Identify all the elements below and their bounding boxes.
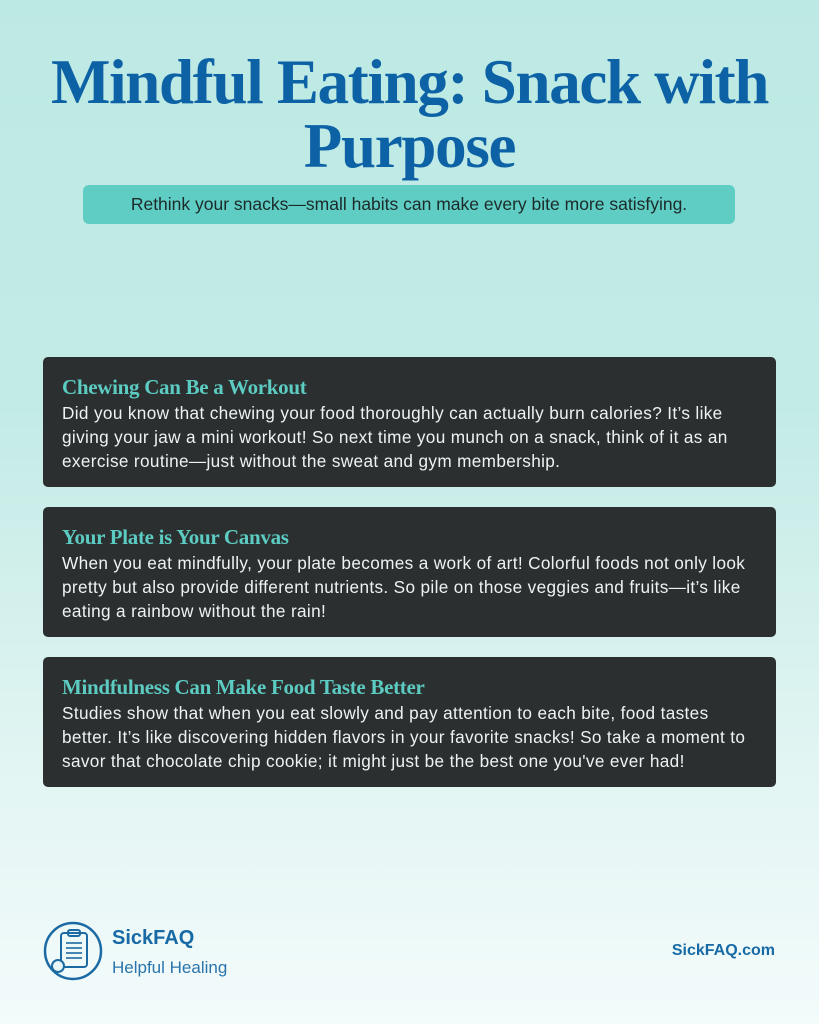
heading: plate: Your Plate is Your Canvas [62, 525, 289, 549]
title: Purpose [304, 111, 515, 181]
title [51, 47, 768, 181]
text: taste: savor that chocolate chip cookie; it might just be the best one you've ever had! [62, 751, 685, 771]
tagline: Helpful Healing [112, 958, 227, 977]
panel: chewing [43, 357, 776, 487]
text: plate: When you eat mindfully, your plate becomes a work of art! Colorful foods not only look [62, 553, 745, 573]
text: plate: pretty but also provide different nutrients. So pile on those veggies and fruits—it’s like [62, 577, 741, 597]
text: taste: Studies show that when you eat slowly and pay attention to each bite, food tastes [62, 703, 709, 723]
subtitle banner: Rethink your snacks—small habits can make every bite more satisfying. [131, 194, 687, 214]
text: taste [62, 703, 745, 771]
brand name: SickFAQ [112, 927, 194, 949]
text: chewing: giving your jaw a mini workout! So next time you munch on a snack, think of it as an [62, 427, 728, 447]
text: chewing: exercise routine—just without the sweat and gym membership. [62, 451, 560, 471]
panel: taste [43, 657, 776, 787]
subtitle banner [83, 185, 735, 224]
icon: logo clipboard [44, 922, 102, 980]
text: plate: eating a rainbow without the rain! [62, 601, 326, 621]
text: plate [62, 553, 745, 621]
website url: SickFAQ.com [672, 942, 775, 959]
heading: taste: Mindfulness Can Make Food Taste Better [62, 675, 425, 699]
text: chewing [62, 403, 728, 471]
title: Mindful Eating: Snack with [51, 47, 768, 117]
text: chewing: Did you know that chewing your food thoroughly can actually burn calories? It’s like [62, 403, 723, 423]
text: taste: better. It’s like discovering hidden flavors in your favorite snacks! So take a moment to [62, 727, 745, 747]
panel: plate [43, 507, 776, 637]
heading: chewing: Chewing Can Be a Workout [62, 375, 306, 399]
